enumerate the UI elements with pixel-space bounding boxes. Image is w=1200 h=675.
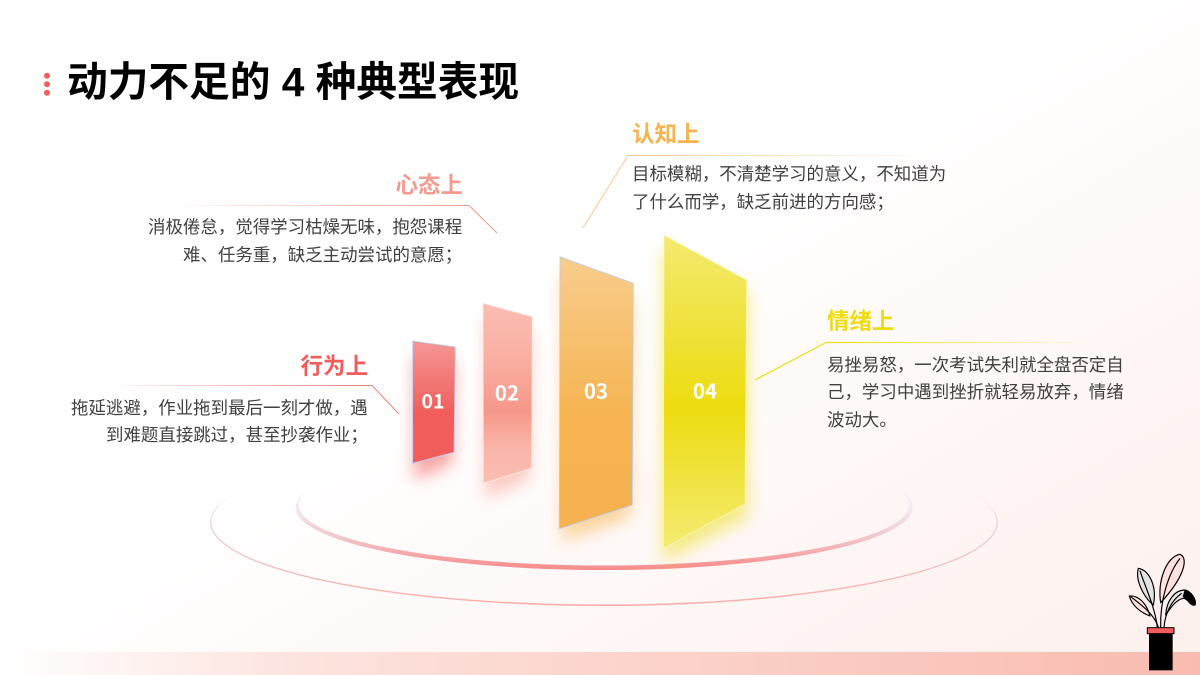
block: 心态上	[148, 173, 463, 265]
block: 行为上	[71, 354, 368, 445]
leaf: grey left	[1138, 568, 1157, 627]
text: 心态上	[148, 217, 462, 265]
bar 03: 03	[584, 374, 608, 404]
leader: 行为上	[110, 386, 399, 414]
block: 情绪上	[827, 309, 1124, 430]
bar 01: 01	[421, 386, 445, 414]
heading: 心态上: 心态上	[395, 173, 463, 198]
text: 认知上: 了什么而学，缺乏前进的方向感；	[632, 192, 894, 212]
heading: 情绪上: 情绪上	[827, 309, 895, 334]
leaf: grey right	[1164, 590, 1195, 627]
text: 情绪上: 波动大。	[827, 410, 897, 430]
inner ring	[295, 445, 912, 570]
text: 情绪上: 己，学习中遇到挫折就轻易放弃，情绪	[827, 382, 1124, 402]
block: 认知上	[632, 122, 946, 212]
text: 认知上	[632, 164, 946, 212]
bottom band	[0, 652, 1200, 675]
leaf: pink large	[1160, 554, 1184, 627]
title: 动力不足的 4 种典型表现	[67, 59, 519, 105]
text: 心态上: 难、任务重，缺乏主动尝试的意愿；	[183, 245, 462, 265]
bar 02	[483, 303, 532, 498]
outer ring	[210, 439, 998, 606]
text: 行为上: 拖延逃避，作业拖到最后一刻才做，遇	[71, 398, 368, 418]
bar 04: 04	[693, 374, 717, 404]
bar 04	[663, 235, 748, 562]
text: 情绪上	[827, 355, 1124, 430]
text: 认知上: 目标模糊，不清楚学习的意义，不知道为	[632, 164, 946, 184]
bar 03	[559, 257, 633, 542]
heading: 认知上: 认知上	[632, 122, 700, 147]
leader: 认知上	[583, 156, 930, 228]
pot	[1147, 628, 1174, 670]
text: 行为上	[71, 398, 368, 445]
text: 行为上: 到难题直接跳过，甚至抄袭作业；	[106, 425, 368, 445]
leaf: pink small	[1129, 596, 1158, 627]
bar 02: 02	[495, 376, 519, 406]
heading: 行为上: 行为上	[300, 354, 368, 379]
text: 心态上: 消极倦怠，觉得学习枯燥无味，抱怨课程	[148, 217, 462, 237]
bar 01	[413, 341, 455, 480]
leader: 情绪上	[755, 342, 1100, 380]
leader: 心态上	[170, 206, 497, 233]
text: 情绪上: 易挫易怒，一次考试失利就全盘否定自	[827, 355, 1124, 375]
